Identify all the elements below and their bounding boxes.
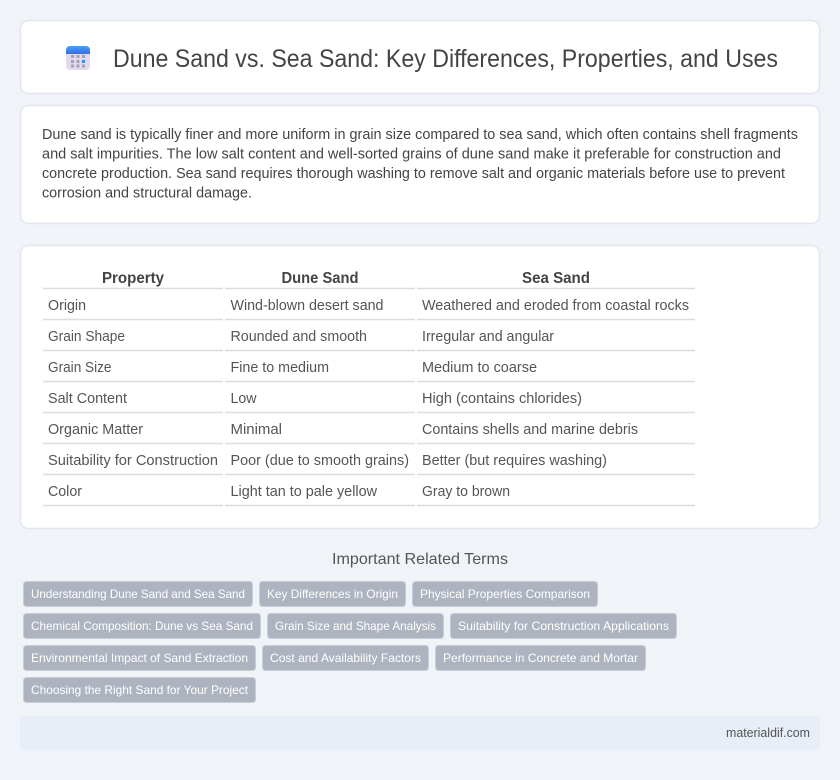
row: grain size: Grain Size [48,360,112,376]
tag: key differences in origin [260,582,406,606]
row: organic matter: Organic Matter [48,422,143,438]
text block: introduction: Dune sand is typically finer and more uniform in grain size compared to sea sand, which often contains shell fragments [42,127,798,143]
row: grain size [43,360,695,382]
row: organic matter [43,422,695,444]
tag: understanding dune sand and sea sand: Understanding Dune Sand and Sea Sand [31,587,245,601]
row: salt content: Low [230,391,257,407]
row: organic matter: Contains shells and marine debris [422,422,638,438]
tag: suitability for construction applications [450,614,676,638]
tag: choosing the right sand: Choosing the Right Sand for Your Project [31,683,249,697]
row: grain shape: Grain Shape [48,329,125,345]
footer source text: materialdif.com [726,726,810,740]
tag: choosing the right sand [24,678,256,702]
table header [43,270,695,288]
row: salt content [43,391,695,412]
tag: grain size and shape analysis: Grain Size and Shape Analysis [275,619,436,633]
row: origin: Origin [48,298,86,314]
tag: cost and availability factors: Cost and Availability Factors [270,651,421,665]
row: salt content: Salt Content [48,391,127,407]
tag: physical properties comparison: Physical Properties Comparison [420,587,590,601]
icon: calendar [66,46,90,70]
heading: important related terms: Important Related Terms [332,551,508,568]
tag: performance in concrete and mortar: Performance in Concrete and Mortar [443,651,638,665]
row: color: Color [48,484,82,500]
row: suitability for construction: Poor (due to smooth grains) [230,453,409,469]
row: suitability for construction [43,453,695,474]
row: origin [43,298,695,320]
panel: comparison table [20,246,820,528]
table header: Property [102,270,164,287]
row: suitability for construction: Better (but requires washing) [422,453,607,469]
tag: suitability for construction applications: Suitability for Construction Applications [458,619,669,633]
tag: environmental impact of sand extraction [24,646,256,670]
title: Dune Sand vs. Sea Sand: Key Differences, Properties, and Uses [113,45,778,73]
row: organic matter: Minimal [230,422,282,438]
row: origin: Wind-blown desert sand [230,298,384,314]
text block: introduction: and salt impurities. The low salt content and well-sorted grains of dune sand make it preferable for construction and [42,146,781,162]
panel: header [20,20,820,94]
row: grain size: Fine to medium [230,360,329,376]
tag: environmental impact of sand extraction: Environmental Impact of Sand Extraction [31,651,248,665]
panel: related term tags [24,582,676,702]
tag: chemical composition: Chemical Composition: Dune vs Sea Sand [31,619,253,633]
tag: performance in concrete and mortar [436,646,646,670]
panel: introduction [20,106,820,224]
row: origin: Weathered and eroded from coastal rocks [422,298,689,314]
row: salt content: High (contains chlorides) [422,391,582,407]
tag: cost and availability factors [262,646,428,670]
row: suitability for construction: Suitability for Construction [48,453,218,469]
tag: understanding dune sand and sea sand [24,582,252,606]
table header: Dune Sand [282,270,358,287]
footer [20,716,820,750]
tag: chemical composition [24,614,260,638]
text block: introduction: corrosion and structural damage. [42,186,252,202]
row: grain shape [43,329,695,350]
tag: key differences in origin: Key Differences in Origin [267,587,398,601]
text block: introduction: concrete production. Sea sand requires thorough washing to remove salt and organic materials before use to prevent [42,166,785,182]
tag: physical properties comparison [412,582,598,606]
row: grain shape: Irregular and angular [422,329,554,345]
row: grain shape: Rounded and smooth [230,329,367,345]
row: grain size: Medium to coarse [422,360,537,376]
row: color: Gray to brown [422,484,510,500]
text block: introduction [42,127,798,202]
row: color: Light tan to pale yellow [230,484,378,500]
tag: grain size and shape analysis [268,614,444,638]
table header: Sea Sand [522,270,590,287]
row: color [43,484,695,506]
